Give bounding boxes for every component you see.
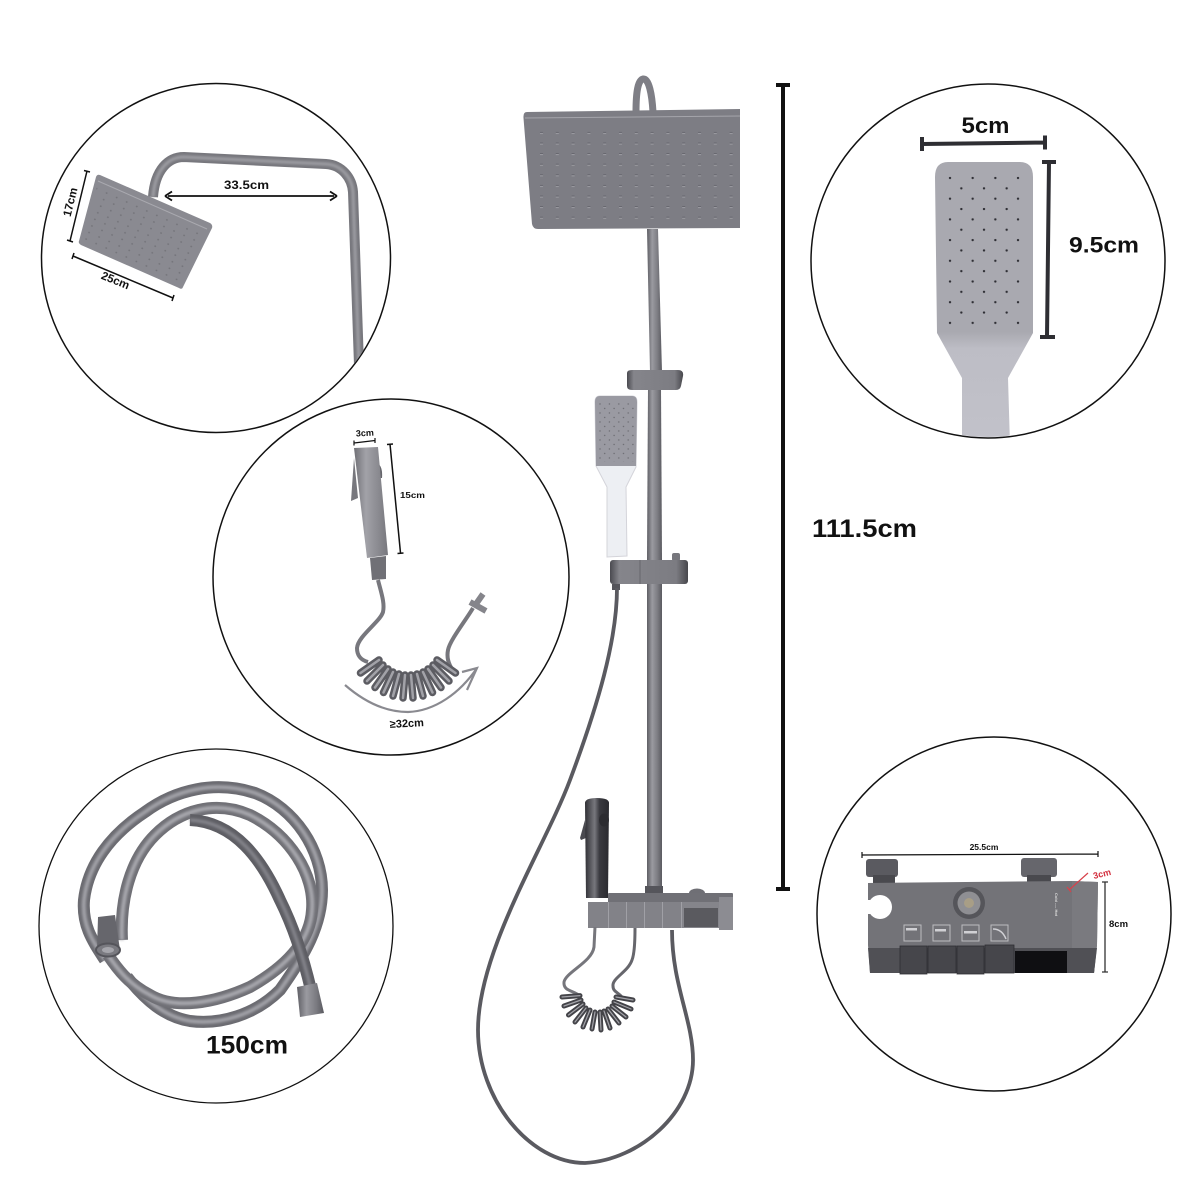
dimension: head depth [67,170,90,242]
dimension: arm reach [165,192,337,200]
upper slider clamp [627,370,683,390]
panel: bidet sprayer dimensions [213,399,569,755]
panel: mixer control dimensions [817,737,1171,1091]
total height dimension line [776,84,790,890]
label: 15cm: 15cm [400,490,425,500]
panel: rain shower head dimensions [42,84,390,432]
hose connector nut [96,915,120,956]
small spiral hose [562,927,635,1030]
label: 3cm: 3cm [356,428,374,438]
label: 17cm: 17cm [62,187,80,218]
mixer body: Cold ---- Hot [1054,893,1059,917]
label: 25cm: 25cm [99,270,131,292]
hand shower head [935,162,1033,445]
coiled shower hose [84,787,322,1022]
long shower hose [478,588,693,1163]
bidet sprayer [580,798,609,898]
label: 150cm: 150cm [206,1032,288,1060]
sprayer body [351,447,388,580]
dimension: mixer width [862,851,1098,858]
mixer control bar [588,888,733,930]
panel: main shower system [478,79,740,1163]
spiral hose [357,580,486,698]
dimension: sprayer length [387,444,404,554]
vertical riser rod [645,229,663,898]
shower arm [153,157,359,365]
panel: hand shower dimensions [811,84,1165,445]
dimension: head width [72,253,174,301]
dimension: head height [1040,162,1056,337]
stretch arrow [345,668,477,712]
dimension: sprayer width [354,438,375,446]
angled shower head [79,175,212,289]
label: 5cm: 5cm [962,113,1010,138]
label: 3cm (red): 3cm [1092,867,1112,881]
panel: hose length [39,749,393,1103]
rain shower head [523,109,740,229]
label: 9.5cm: 9.5cm [1069,232,1139,258]
label: 33.5cm: 33.5cm [224,180,269,192]
sliding bracket [610,553,688,590]
dimension: mixer height [1102,882,1108,972]
dimension: mixer depth (red) [1067,873,1088,892]
dimension: head width [922,136,1045,151]
mixer body [866,858,1098,974]
label: total height: 111.5cm [812,515,917,543]
gooseneck arm [636,79,653,112]
label: 8cm: 8cm [1109,919,1128,930]
label: minimum hose length: ≥32cm [389,717,424,731]
hose end fitting [297,983,324,1017]
hand shower [595,396,637,557]
label: 25.5cm: 25.5cm [970,842,999,852]
